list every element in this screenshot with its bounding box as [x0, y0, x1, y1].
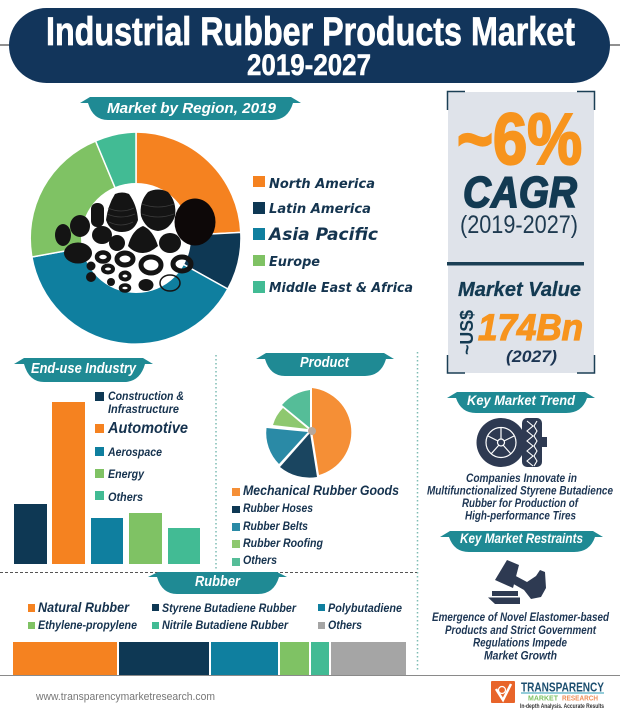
legend: product: [232, 482, 399, 567]
legend item: Styrene Butadiene Rubber: Styrene Butadiene Rubber: [162, 601, 297, 615]
heading: end-use industry: [14, 358, 153, 382]
logo: Transparency Market Research: RESEARCH: [562, 696, 598, 702]
heading: key market trend: [447, 392, 595, 413]
legend item: Mechanical Rubber Goods: Mechanical Rubber Goods: [243, 482, 399, 498]
heading: product: [256, 353, 394, 376]
heading: product: Product: [300, 354, 350, 371]
slice: Rubber Hoses: [280, 433, 317, 478]
bar: Others: [168, 528, 200, 564]
panel: CAGR and market value: [447, 92, 594, 373]
segment: Ethylene-propylene: [280, 642, 309, 675]
legend item: Construction and Infrastructure: Infrastructure: [108, 404, 180, 416]
segment: Polybutadiene: [211, 642, 278, 675]
heading: key market trend: Key Market Trend: [467, 392, 575, 408]
donut chart: market by region: [30, 132, 241, 344]
legend item: Others: Others: [328, 618, 362, 632]
legend item: Middle East and Africa: Middle East & Africa: [269, 281, 413, 296]
stacked bar: rubber: [13, 642, 406, 675]
legend item: Polybutadiene: Polybutadiene: [328, 601, 402, 615]
legend item: Construction and Infrastructure: Construction &: [108, 391, 184, 403]
text: key market trend: Companies Innovate in: [466, 473, 577, 485]
legend item: Others: Others: [243, 555, 277, 567]
legend item: Energy: Energy: [108, 469, 145, 481]
segment: Nitrile Butadiene Rubber: [311, 642, 329, 675]
text: key market trend: High-performance Tires: [465, 510, 576, 522]
bar: Energy: [129, 513, 162, 564]
slice: Rubber Belts: [266, 428, 308, 464]
text: key market trend: [427, 473, 614, 522]
footer website: www.transparencymarketresearch.com: [35, 691, 215, 703]
legend item: Rubber Hoses: Rubber Hoses: [243, 503, 313, 515]
bar: Construction and Infrastructure: [14, 504, 47, 564]
heading: end-use industry: End-use Industry: [31, 360, 137, 377]
CAGR label: CAGR: [463, 168, 577, 217]
slice: Europe: [30, 141, 136, 257]
slice: North America: [136, 132, 241, 238]
legend item: Europe: Europe: [269, 255, 320, 270]
legend item: Aerospace: Aerospace: [107, 447, 163, 459]
text: key market trend: Rubber for Production of: [462, 498, 579, 510]
text: key market restraints: Regulations Impede: [473, 638, 568, 650]
logo: Transparency Market Research: In-depth Analysis. Accurate Results: [520, 704, 605, 710]
market value label: Market Value: [458, 279, 581, 301]
slice: Latin America: [136, 232, 241, 289]
icon: gavel: [488, 560, 546, 604]
bar chart: end-use industry: [14, 402, 200, 564]
heading: rubber: [148, 572, 287, 594]
segment: Natural Rubber: [13, 642, 117, 675]
text: key market restraints: Market Growth: [484, 650, 557, 662]
CAGR value: ~6%: [457, 100, 582, 180]
text: key market restraints: [432, 612, 610, 662]
logo mark: [491, 681, 515, 703]
slice: Middle East and Africa: [96, 132, 136, 238]
legend item: Rubber Roofing: Rubber Roofing: [243, 538, 323, 550]
heading: key market restraints: [440, 530, 603, 552]
market value number: 174Bn: [478, 307, 583, 348]
legend item: Rubber Belts: Rubber Belts: [243, 521, 308, 533]
icon: tire and wheel: [476, 418, 547, 467]
segment: Others: [331, 642, 406, 675]
logo: Transparency Market Research: [491, 680, 605, 710]
logo: Transparency Market Research: MARKET: [528, 696, 559, 702]
segment: Styrene Butadiene Rubber: [119, 642, 209, 675]
heading: key market restraints: Key Market Restraints: [460, 530, 583, 546]
legend item: Others: Others: [108, 492, 143, 504]
slice: Rubber Roofing: [273, 408, 308, 429]
subtitle years: 2019-2027: [247, 49, 371, 82]
legend item: Ethylene-propylene: Ethylene-propylene: [38, 618, 137, 632]
title banner: [9, 8, 610, 83]
legend item: Construction and Infrastructure: [95, 391, 184, 416]
icon: rubber products: [55, 190, 216, 291]
legend item: Latin America: Latin America: [269, 202, 371, 217]
currency label: ~US$: [457, 310, 477, 355]
heading: market by region: Market by Region, 2019: [107, 100, 277, 117]
bar: Aerospace: [91, 518, 123, 564]
legend item: Automotive: Automotive: [107, 420, 188, 437]
slice: Mechanical Rubber Goods: [312, 388, 351, 475]
legend item: North America: North America: [269, 177, 375, 192]
legend: rubber: [28, 599, 402, 632]
text: key market restraints: Products and Strict Government: [445, 625, 597, 637]
heading: market by region: [80, 97, 301, 120]
CAGR period: (2019-2027): [460, 211, 578, 239]
legend item: Nitrile Butadiene Rubber: Nitrile Butadiene Rubber: [162, 618, 289, 632]
heading: rubber: Rubber: [195, 573, 241, 590]
slice: Asia Pacific: [32, 238, 228, 344]
legend item: Natural Rubber: Natural Rubber: [38, 599, 130, 615]
bar: Automotive: [52, 402, 85, 564]
market value year: (2027): [506, 347, 557, 366]
pie chart: product: [266, 388, 351, 478]
legend item: Asia Pacific: Asia Pacific: [267, 225, 378, 245]
legend: regions: [253, 176, 413, 296]
legend: end-use industry: [95, 391, 188, 504]
slice: Others: [282, 390, 310, 428]
